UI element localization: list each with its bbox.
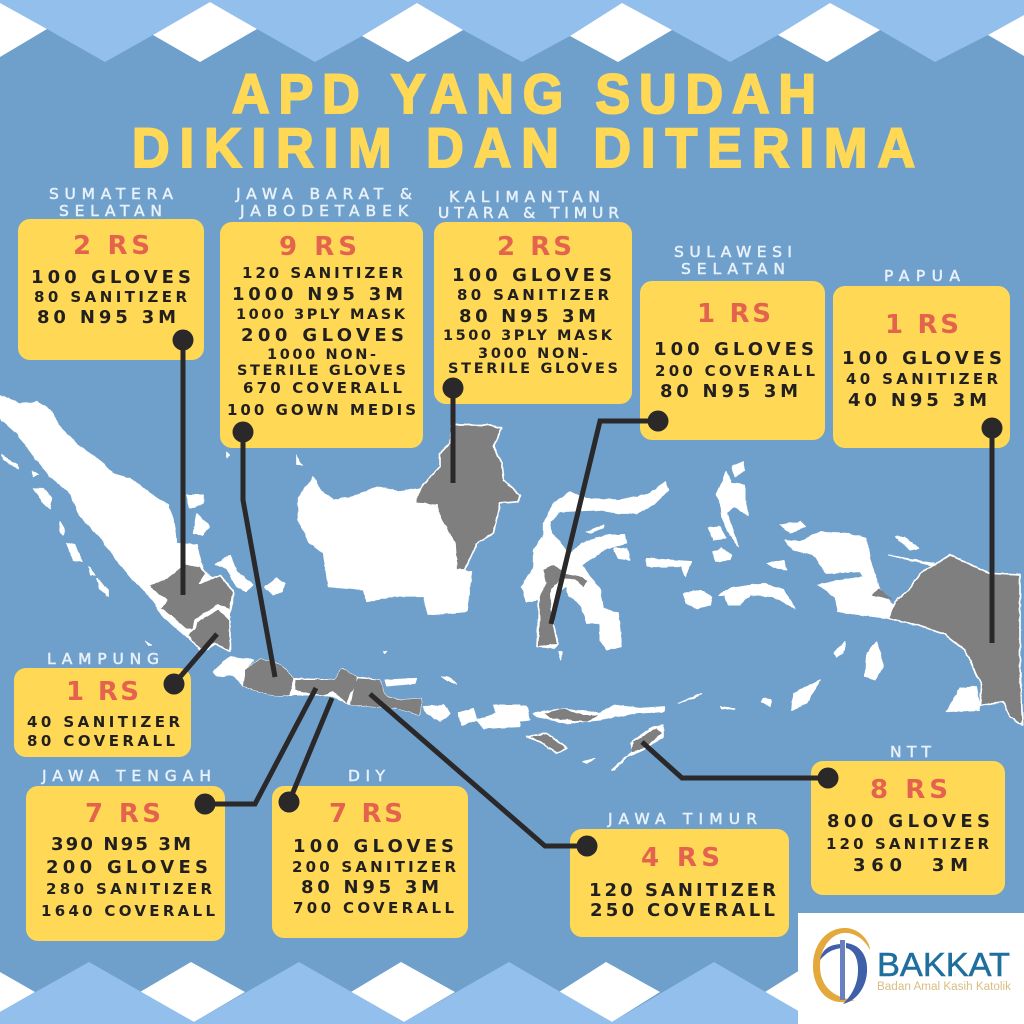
connector: Lampung	[164, 634, 217, 694]
card: Papua	[833, 286, 1010, 448]
card: Sulawesi Selatan: 100 GLOVES	[654, 339, 814, 360]
heading: Sumatera Selatan: SUMATERA	[49, 185, 173, 203]
card: DIY	[272, 786, 468, 938]
card: DIY: 7 RS	[329, 799, 403, 829]
card: Kalimantan Utara & Timur: STERILE GLOVES	[448, 361, 618, 377]
card: Jawa Barat & Jabodetabek: 1000 NON-	[267, 347, 376, 363]
heading: Kalimantan Utara & Timur	[438, 188, 619, 222]
card: Sulawesi Selatan: 200 COVERALL	[655, 362, 815, 380]
map: South Sumatra region	[148, 563, 233, 652]
heading: Papua: PAPUA	[884, 267, 960, 285]
heading: Jawa Barat & Jabodetabek: JAWA BARAT &	[235, 185, 412, 203]
panel: Sulawesi Selatan	[551, 243, 825, 624]
card: Jawa Barat & Jabodetabek: 1000 N95 3M	[232, 284, 403, 305]
map: Sulawesi	[522, 482, 668, 660]
logo tagline: Badan Amal Kasih Katolik	[877, 981, 1011, 993]
card: Jawa Barat & Jabodetabek: 1000 3PLY MASK	[236, 307, 406, 323]
panel: Jawa Timur	[370, 694, 789, 937]
card: Papua: 1 RS	[885, 310, 959, 340]
panel: Papua	[833, 267, 1010, 643]
card: Papua: 40 N95 3M	[848, 390, 987, 411]
card: NTT	[811, 761, 1005, 895]
card: Kalimantan Utara & Timur: 80 N95 3M	[459, 306, 596, 327]
panel: NTT	[642, 742, 1005, 895]
connector: NTT	[642, 742, 838, 788]
card: DIY: 100 GLOVES	[293, 836, 454, 857]
heading: DIY: DIY	[348, 767, 386, 785]
heading: NTT: NTT	[890, 743, 932, 761]
card: Jawa Timur	[570, 829, 789, 937]
card: Jawa Barat & Jabodetabek: STERILE GLOVES	[237, 363, 406, 379]
panel: DIY	[272, 698, 468, 938]
card: Papua: 100 GLOVES	[842, 348, 1002, 369]
card: Kalimantan Utara & Timur	[434, 222, 632, 404]
panel: Jawa Barat & Jabodetabek	[220, 185, 423, 677]
card: Jawa Barat & Jabodetabek: 120 SANITIZER	[242, 264, 403, 282]
card: Sulawesi Selatan: 80 N95 3M	[660, 381, 798, 402]
connector: Jawa Barat	[232, 422, 275, 677]
card: Lampung: 1 RS	[66, 677, 139, 707]
card: Kalimantan Utara & Timur: 100 GLOVES	[452, 265, 612, 286]
connector: Kalimantan	[442, 378, 464, 483]
connector: Sumatera Selatan	[172, 330, 194, 595]
card: Jawa Barat & Jabodetabek: 100 GOWN MEDIS	[227, 401, 416, 419]
card: DIY: 700 COVERALL	[293, 899, 454, 917]
card: Jawa Tengah: 200 GLOVES	[46, 857, 208, 878]
panel: Lampung	[14, 634, 217, 757]
connector: Jawa Tengah	[194, 688, 316, 814]
card: Sumatera Selatan: 2 RS	[73, 231, 150, 261]
card: Jawa Tengah: 1640 COVERALL	[41, 902, 215, 920]
card: Jawa Timur: 250 COVERALL	[590, 900, 775, 921]
heading: Kalimantan Utara & Timur: UTARA & TIMUR	[438, 204, 619, 222]
heading: Sulawesi Selatan: SULAWESI	[674, 243, 792, 261]
card: Sumatera Selatan	[18, 219, 204, 360]
card: NTT: 120 SANITIZER	[826, 835, 989, 853]
card: Kalimantan Utara & Timur: 2 RS	[497, 232, 572, 262]
card: Jawa Tengah: 7 RS	[85, 799, 161, 829]
card: Jawa Timur: 120 SANITIZER	[589, 880, 776, 901]
heading: Jawa Barat & Jabodetabek	[235, 185, 412, 220]
card: Sulawesi Selatan	[640, 281, 825, 440]
map: Java	[213, 657, 450, 722]
card: Sumatera Selatan: 80 N95 3M	[37, 307, 176, 328]
card: NTT: 8 RS	[870, 775, 948, 805]
connector: Jawa Timur	[370, 694, 598, 856]
title: APD YANG SUDAH	[232, 63, 816, 125]
card: NTT: 800 GLOVES	[827, 811, 990, 832]
card: Jawa Barat & Jabodetabek	[220, 222, 423, 448]
heading: Sumatera Selatan	[49, 185, 173, 220]
panel: Jawa Tengah	[26, 688, 316, 941]
bottom zigzag banner	[0, 962, 800, 1024]
heading: Sulawesi Selatan	[674, 243, 792, 278]
heading: Jawa Timur: JAWA TIMUR	[607, 810, 757, 828]
heading: Lampung: LAMPUNG	[47, 650, 159, 668]
heading: Kalimantan Utara & Timur: KALIMANTAN	[449, 188, 600, 206]
card: Jawa Tengah	[26, 786, 225, 941]
heading: Sulawesi Selatan: SELATAN	[681, 260, 785, 278]
map: eastern islands	[500, 462, 1023, 770]
card: Sumatera Selatan: 100 GLOVES	[31, 267, 191, 288]
top zigzag banner	[0, 0, 1024, 62]
panel: Sumatera Selatan	[18, 185, 204, 595]
card: DIY: 80 N95 3M	[301, 877, 439, 898]
card: Papua: 40 SANITIZER	[846, 370, 998, 388]
card: DIY: 200 SANITIZER	[292, 858, 456, 876]
card: Jawa Barat & Jabodetabek: 200 GLOVES	[241, 325, 404, 346]
heading: Jawa Tengah: JAWA TENGAH	[41, 767, 211, 785]
map: western islands	[0, 395, 520, 728]
card: Lampung	[14, 668, 191, 757]
title	[132, 63, 915, 179]
card: Lampung: 80 COVERALL	[27, 732, 175, 750]
heading: Sumatera Selatan: SELATAN	[59, 202, 162, 220]
connector: Sulawesi Selatan	[551, 410, 668, 624]
icon: BAKKAT emblem	[813, 928, 870, 1004]
card: Jawa Tengah: 280 SANITIZER	[46, 880, 212, 898]
card: NTT: 360 3M	[853, 855, 968, 876]
card: Kalimantan Utara & Timur: 3000 NON-	[478, 346, 588, 362]
card: Jawa Timur: 4 RS	[641, 843, 720, 873]
logo wordmark: BAKKAT	[877, 946, 1010, 983]
logo: BAKKAT	[798, 913, 1024, 1024]
heading: Jawa Barat & Jabodetabek: JABODETABEK	[239, 202, 409, 220]
card: Jawa Tengah: 390 N95 3M	[51, 834, 191, 855]
card: Kalimantan Utara & Timur: 80 SANITIZER	[457, 286, 609, 304]
map of Indonesia	[0, 395, 1023, 770]
card: Lampung: 40 SANITIZER	[27, 713, 180, 731]
panel: Kalimantan Utara & Timur	[434, 188, 632, 483]
connector: Papua	[982, 418, 1002, 643]
card: Kalimantan Utara & Timur: 1500 3PLY MASK	[443, 328, 613, 344]
card: Sumatera Selatan: 80 SANITIZER	[34, 288, 187, 306]
card: Jawa Barat & Jabodetabek: 9 RS	[279, 232, 357, 262]
card: Jawa Barat & Jabodetabek: 670 COVERALL	[243, 379, 402, 397]
title: DIKIRIM DAN DITERIMA	[132, 117, 915, 179]
card: Sulawesi Selatan: 1 RS	[697, 299, 771, 329]
connector: DIY	[278, 698, 332, 812]
